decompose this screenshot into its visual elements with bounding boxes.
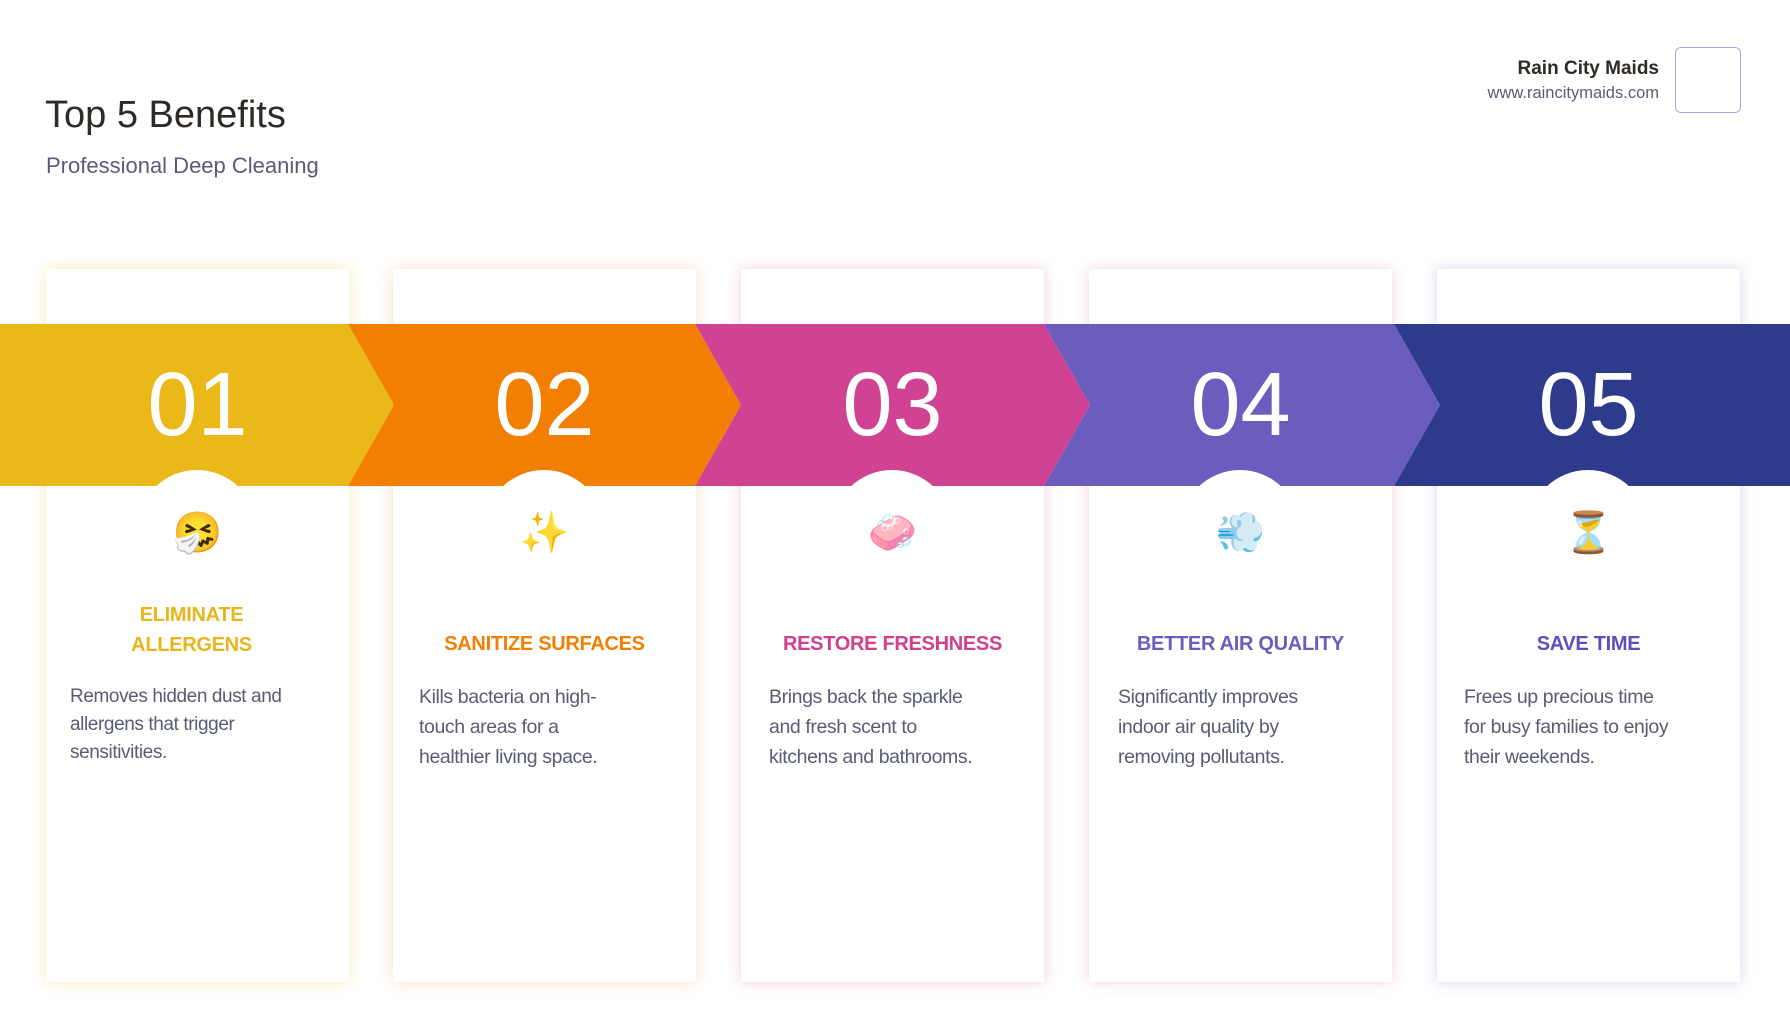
text: ✨ [520,509,569,556]
heading 3: RESTORE FRESHNESS [783,633,1002,655]
logo placeholder box [1675,47,1741,113]
description 2: touch areas for a [419,716,559,738]
text: 04 [1190,355,1291,455]
icon circles [137,470,257,590]
description 4 [1118,686,1298,768]
description 1 [70,686,282,763]
text: 02 [494,355,595,455]
description 2: Kills bacteria on high- [419,686,596,708]
heading 4: BETTER AIR QUALITY [1137,633,1344,655]
description 5 [1464,686,1668,768]
brand block: Rain City Maids [1518,58,1659,79]
card 3 [741,269,1044,982]
brand block: www.raincitymaids.com [1488,84,1659,102]
description 2 [419,686,597,768]
text: ⏳ [1564,509,1613,556]
description 1: Removes hidden dust and [70,686,282,707]
description 5: Frees up precious time [1464,686,1654,708]
text: 🧼 [868,509,917,556]
description 3: kitchens and bathrooms. [769,746,972,768]
heading 1 [131,604,252,656]
card 4 [1089,269,1392,982]
subtitle: Professional Deep Cleaning [46,153,319,178]
description 5: for busy families to enjoy [1464,716,1668,738]
description 2: healthier living space. [419,746,597,768]
card 2 [393,269,696,982]
text: 05 [1538,355,1639,455]
numbers: 01 [147,355,248,455]
card 5 [1437,269,1740,982]
heading 1: ELIMINATE [140,604,243,626]
text: 03 [842,355,943,455]
description 3 [769,686,972,768]
description 4: removing pollutants. [1118,746,1285,768]
description 1: allergens that trigger [70,714,234,735]
title: Top 5 Benefits [45,94,286,136]
icons: 🤧 [173,509,222,556]
brand block [1488,58,1659,102]
description 3: and fresh scent to [769,716,917,738]
text: 💨 [1216,509,1265,556]
heading 2: SANITIZE SURFACES [444,633,645,655]
description 1: sensitivities. [70,742,167,763]
description 4: Significantly improves [1118,686,1298,708]
description 3: Brings back the sparkle [769,686,962,708]
heading 1: ALLERGENS [131,634,252,656]
description 5: their weekends. [1464,746,1595,768]
heading 5: SAVE TIME [1537,633,1640,655]
description 4: indoor air quality by [1118,716,1279,738]
card 1 [46,269,349,982]
